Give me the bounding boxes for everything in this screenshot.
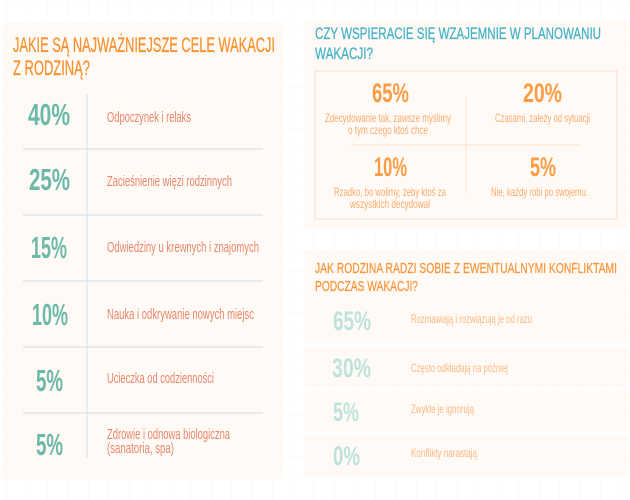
heading: conflicts — [304, 250, 628, 343]
panel: mutual support in planning — [304, 21, 628, 228]
heading: conflicts: PODCZAS WAKACJI? — [315, 278, 418, 295]
heading: support — [315, 24, 601, 63]
panel: handling conflicts — [304, 250, 628, 475]
row: 5% health: 5% — [36, 427, 63, 462]
quadrant: 65%: 65% — [372, 78, 409, 108]
row: 5% health: (sanatoria, spa) — [107, 441, 174, 457]
row: 10% learning: Nauka i odkrywanie nowych miejsc — [107, 307, 254, 323]
row: 10% learning — [32, 297, 254, 332]
row: 25% family bonds — [29, 162, 232, 197]
row: 40% rest and relaxation: Odpoczynek i relaks — [107, 110, 191, 126]
table grid lines — [23, 94, 263, 458]
quadrant: 10%: wszystkich decydował — [349, 197, 430, 211]
quadrant: 10% — [334, 152, 446, 211]
quadrant frame — [315, 71, 617, 219]
row: 30% postpone: Często odkładają na później — [411, 361, 508, 375]
row: 30% postpone: 30% — [332, 353, 371, 383]
row: 0% escalate: 0% — [333, 441, 360, 471]
row: 0% escalate: Konflikty narastają — [411, 446, 477, 460]
row: 5% health — [36, 427, 231, 462]
quadrant: 65%: Zdecydowanie tak, zawsze myślimy — [325, 111, 451, 125]
heading: goals — [13, 34, 275, 80]
row: 5% escape: 5% — [36, 363, 63, 398]
row: 15% visiting relatives: 15% — [31, 230, 67, 265]
quadrant: 20%: 20% — [523, 78, 562, 108]
quadrant: 65% — [325, 78, 451, 137]
row: 5% escape — [36, 363, 214, 398]
quadrant: 65%: o tym czego ktoś chce — [348, 123, 428, 137]
row: 15% visiting relatives: Odwiedziny u krewnych i znajomych — [107, 240, 259, 256]
row: 65% talk: Rozmawiają i rozwiązują je od razu — [411, 312, 532, 326]
quadrant: 20% — [495, 78, 590, 125]
row: 40% rest and relaxation: 40% — [28, 97, 70, 132]
row: 65% talk: 65% — [333, 306, 371, 336]
row: 5% ignore — [304, 391, 628, 432]
row: 10% learning: 10% — [32, 297, 68, 332]
row: 30% postpone — [304, 347, 628, 387]
row: 5% ignore: Zwykle je ignorują — [411, 402, 474, 416]
panel: goals of family holidays — [3, 22, 283, 479]
heading: support: WAKACJI? — [315, 44, 373, 63]
row: 65% talk — [333, 306, 532, 336]
quadrant: 5%: 5% — [530, 152, 556, 182]
heading: goals: Z RODZINĄ? — [13, 57, 90, 80]
quadrant: 10%: Rzadko, bo wolimy, żeby ktoś za — [334, 185, 446, 199]
row: 5% ignore: 5% — [333, 397, 359, 427]
row: 40% rest and relaxation — [28, 97, 191, 132]
row: 0% escalate — [304, 435, 628, 475]
row: 5% escape: Ucieczka od codzienności — [107, 371, 214, 387]
quadrant: 5% — [491, 152, 588, 199]
row: 5% health: Zdrowie i odnowa biologiczna — [107, 427, 231, 443]
row: 25% family bonds: Zacieśnienie więzi rodzinnych — [107, 174, 232, 190]
quadrant: 10%: 10% — [374, 152, 407, 182]
row: 25% family bonds: 25% — [29, 162, 70, 197]
heading: goals: JAKIE SĄ NAJWAŻNIEJSZE CELE WAKACJI — [13, 34, 275, 57]
row: 15% visiting relatives — [31, 230, 259, 265]
